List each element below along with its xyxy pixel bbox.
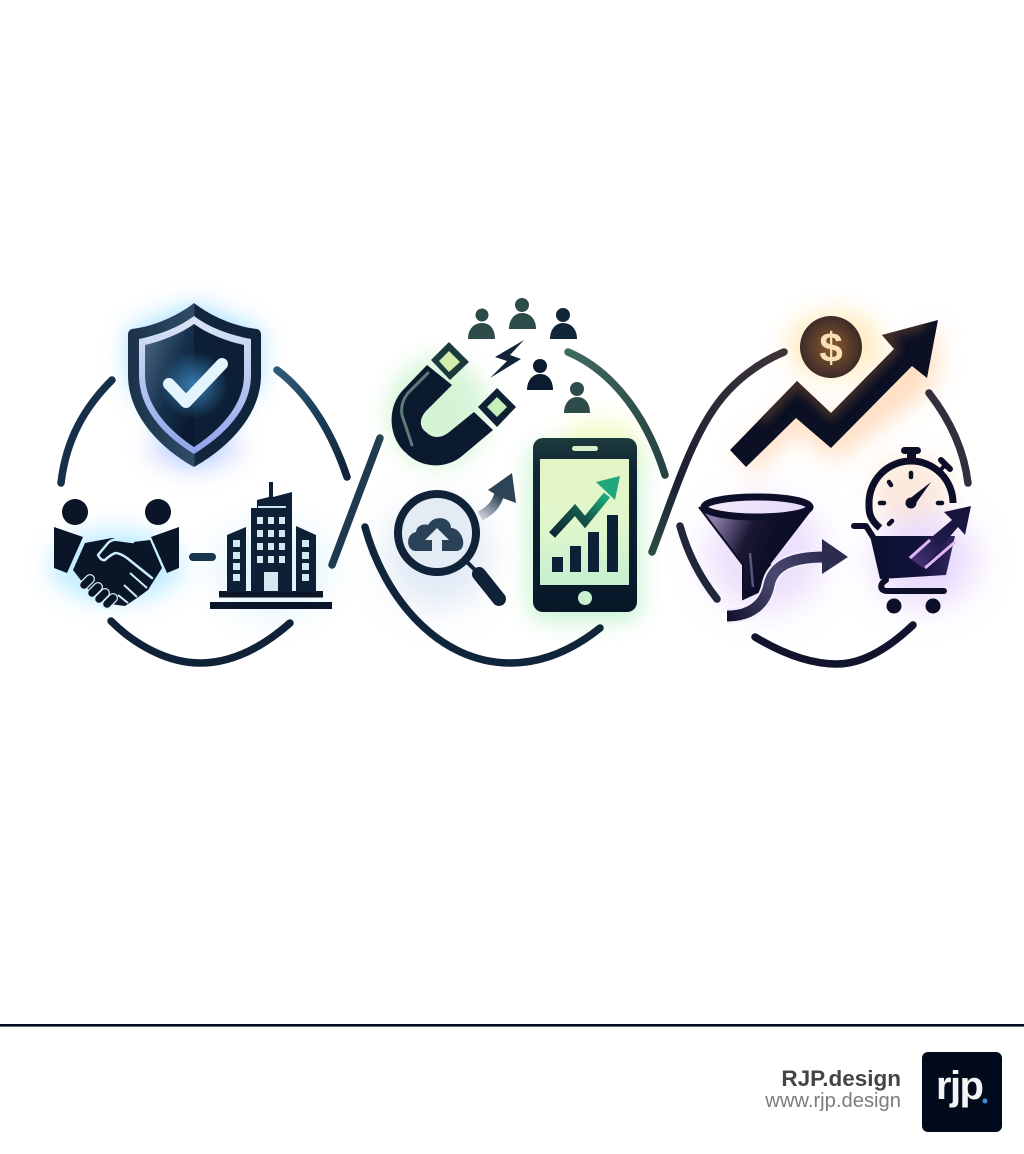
icon: smartphone with chart — [533, 438, 637, 612]
ring: arc segments — [365, 352, 665, 663]
ring: arc segments — [652, 352, 968, 664]
icon: shopping cart with arrow — [854, 506, 971, 614]
icon: office building — [210, 482, 332, 609]
glow: blue halos — [50, 303, 328, 614]
panel: revenue and conversion — [652, 311, 975, 664]
logo badge — [922, 1052, 1002, 1132]
icon: flow arrow — [727, 539, 848, 616]
footer url: www.rjp.design — [764, 1090, 901, 1112]
icon: horseshoe magnet — [392, 342, 516, 465]
icon: growth arrow — [480, 473, 516, 516]
connector dash — [189, 553, 216, 561]
icon: rising zigzag arrow — [730, 320, 938, 467]
icon: stopwatch — [869, 447, 953, 528]
footer brand name: RJP.design — [781, 1066, 901, 1091]
infographic canvas — [0, 292, 1024, 1132]
icon: audience people — [468, 298, 590, 413]
footer rule — [0, 1024, 1024, 1027]
icon: lightning bolt — [490, 340, 524, 378]
logo badge: rjp — [936, 1064, 982, 1108]
ring: arc segments — [61, 370, 380, 663]
icon: dollar coin — [800, 316, 862, 378]
icon: shield with check — [128, 303, 261, 467]
icon: magnifier with cloud upload — [398, 494, 499, 599]
glow: orange and purple halos — [707, 311, 975, 610]
icon: dollar coin: $ — [819, 324, 843, 371]
panel: trust and partnership — [50, 303, 380, 663]
panel: lead generation and growth — [365, 298, 665, 663]
icon: funnel — [699, 497, 813, 599]
glow: green and blue halos — [385, 358, 642, 620]
icon: handshake — [54, 499, 179, 606]
